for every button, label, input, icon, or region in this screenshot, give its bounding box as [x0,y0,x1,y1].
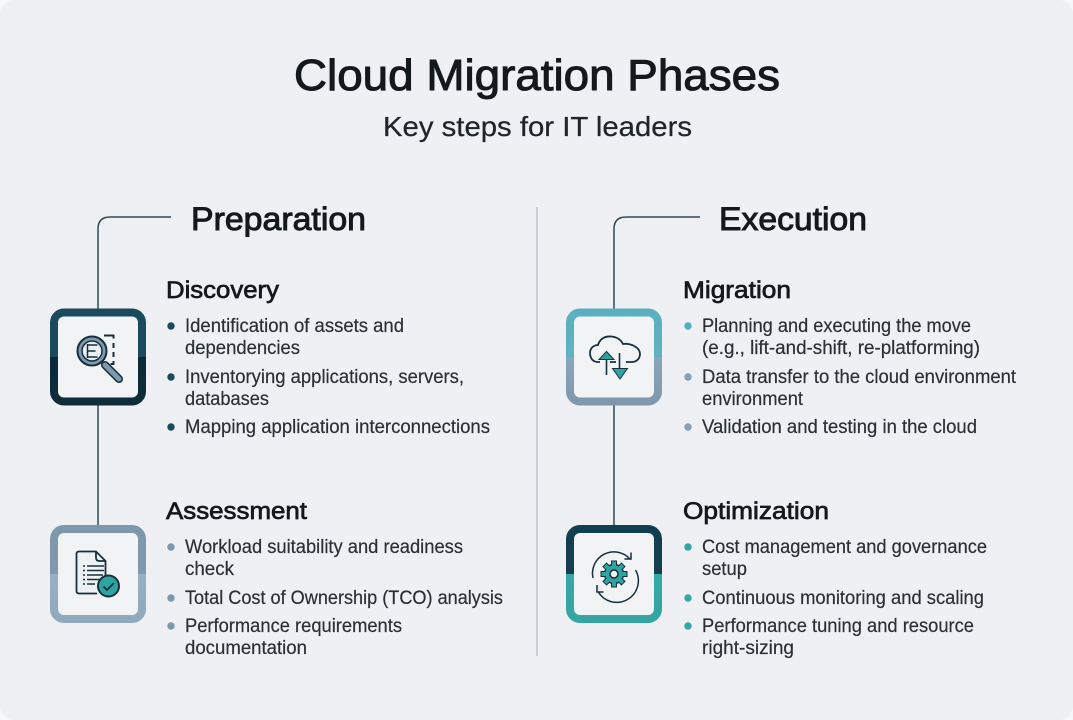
bullet list: migration: environment [702,389,804,410]
bullet list: migration: (e.g., lift-and-shift, re-platforming) [702,338,980,359]
icon: discovery magnifier [54,312,142,402]
bullet list: discovery [167,316,490,438]
bullet list: discovery: Identification of assets and [185,316,404,337]
subtitle: Key steps for IT leaders [383,111,692,142]
bullet list: optimization: Cost management and governance [702,537,987,558]
bullet list: migration [684,316,1017,438]
connector: execution timeline [614,217,700,526]
bullet list: assessment: documentation [185,638,307,659]
connector: preparation timeline [98,217,171,526]
block: migration [683,277,1017,438]
heading: migration: Migration [683,277,791,304]
block: assessment [166,498,503,659]
bullet list: discovery: Mapping application interconnections [185,417,490,438]
bullet list: optimization: right-sizing [702,638,794,659]
bullet list: assessment: Workload suitability and readiness [185,537,463,558]
bullet list: optimization [684,537,987,659]
heading: assessment: Assessment [166,498,307,525]
title: Cloud Migration Phases [294,51,780,100]
bullet list: optimization: Continuous monitoring and scaling [702,588,984,609]
bullet list: discovery: dependencies [185,338,300,359]
icon: assessment document [54,529,142,619]
bullet list: discovery: databases [185,389,269,410]
heading: execution: Execution [719,201,867,237]
bullet list: discovery: Inventorying applications, servers, [185,367,464,388]
bullet list: assessment [167,537,503,659]
block: optimization [683,498,987,659]
heading: optimization: Optimization [683,498,829,525]
bullet list: assessment: Performance requirements [185,616,402,637]
heading: discovery: Discovery [166,277,279,304]
bullet list: assessment: Total Cost of Ownership (TCO) analysis [185,588,503,609]
bullet list: assessment: check [185,559,234,580]
icon: migration cloud [570,312,658,402]
icon: optimization gear [570,529,658,619]
bullet list: optimization: Performance tuning and resource [702,616,974,637]
bullet list: migration: Data transfer to the cloud environment [702,367,1017,388]
heading: preparation: Preparation [191,201,366,237]
block: discovery [166,277,490,438]
bullet list: optimization: setup [702,559,747,580]
bullet list: migration: Validation and testing in the cloud [702,417,977,438]
panel: preparation [54,201,503,659]
bullet list: migration: Planning and executing the move [702,316,971,337]
panel: execution [570,201,1017,659]
center divider [536,207,538,656]
